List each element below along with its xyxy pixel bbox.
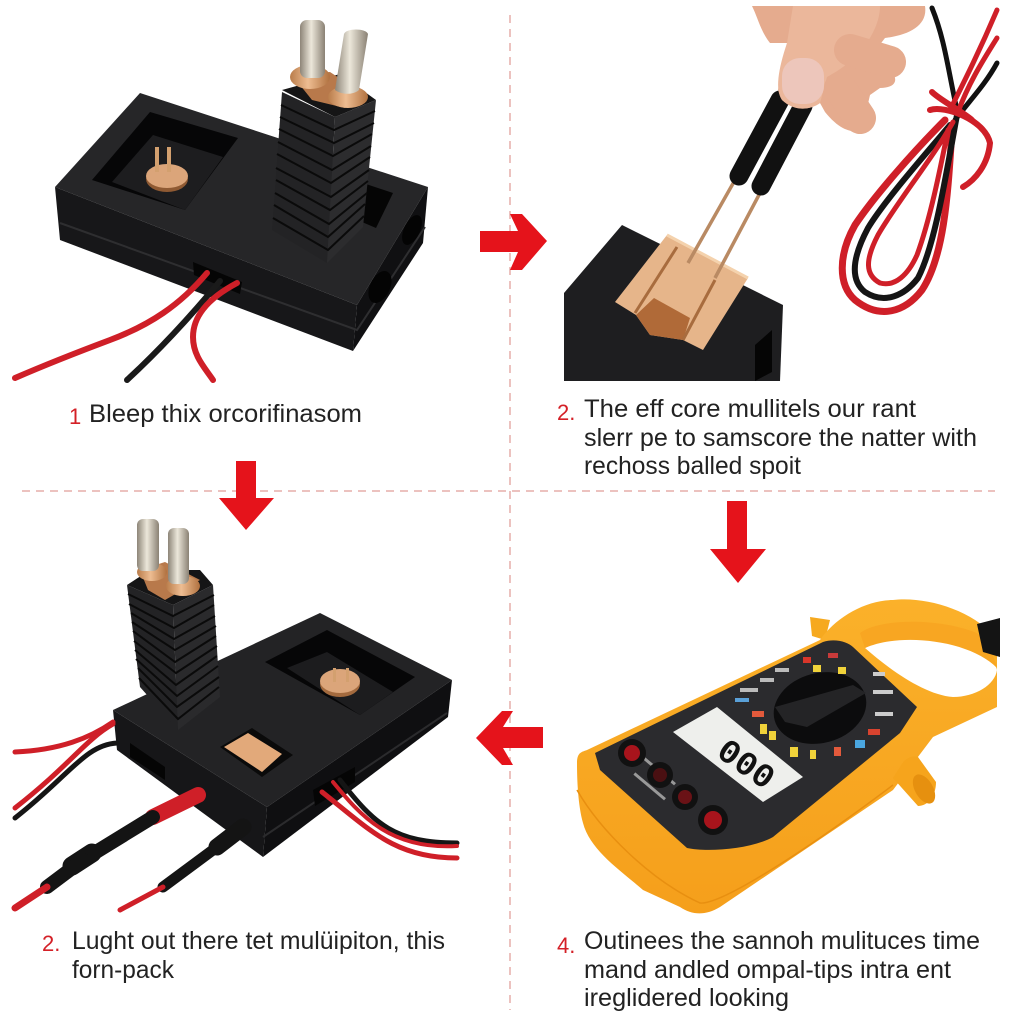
hand (752, 6, 925, 131)
copper terminal (615, 235, 748, 350)
arrow: down left (219, 461, 274, 530)
icon: copper contact (320, 668, 360, 697)
caption 4 (557, 927, 980, 1012)
icon: copper contact (146, 147, 188, 192)
arrow: right (480, 214, 547, 270)
caption 2: rechoss balled spoit (584, 452, 801, 480)
panel: step 1 device (15, 20, 428, 380)
arrow: down right (710, 501, 766, 583)
caption 2: The eff core mullitels our rant (584, 395, 916, 423)
caption 4: mand andled ompal-tips intra ent (584, 956, 951, 984)
caption 4: Outinees the sannoh mulituces time (584, 927, 980, 955)
caption 3: 2. (42, 931, 60, 956)
arrow: left (476, 711, 543, 765)
caption 4: ireglidered looking (584, 984, 789, 1012)
terminal posts (290, 20, 368, 108)
caption 2 (557, 395, 977, 480)
device block (564, 225, 783, 381)
copper slot (220, 728, 293, 777)
probes (688, 100, 803, 278)
caption 1: Bleep thix orcorifinasom (89, 400, 362, 428)
lcd display (673, 707, 803, 802)
terminal posts (137, 519, 200, 600)
caption 2: slerr pe to samscore the natter with (584, 424, 977, 452)
face plate (595, 640, 917, 850)
ribbed tower (127, 570, 220, 730)
rotary dial (766, 662, 874, 754)
ribbed tower (272, 74, 376, 263)
caption 2: 2. (557, 400, 575, 425)
device body (113, 613, 452, 857)
device body (55, 93, 428, 351)
caption 4: 4. (557, 933, 575, 958)
jacks (618, 739, 728, 835)
panel: step 4 clamp multimeter (577, 599, 1000, 913)
caption 1: 1 (69, 404, 81, 429)
dial colour markers (633, 653, 893, 800)
caption 3 (42, 927, 445, 984)
panel: step 3 device (15, 519, 457, 910)
wire bundle (842, 8, 997, 311)
caption 3: forn-pack (72, 956, 174, 984)
lcd display: 000 (709, 733, 781, 799)
wires and test leads (15, 722, 457, 910)
caption 3: Lught out there tet mulüipiton, this (72, 927, 445, 955)
wires (15, 273, 237, 380)
panel: step 2 device and probes (564, 6, 997, 381)
meter body and clamp jaw (577, 599, 1000, 913)
